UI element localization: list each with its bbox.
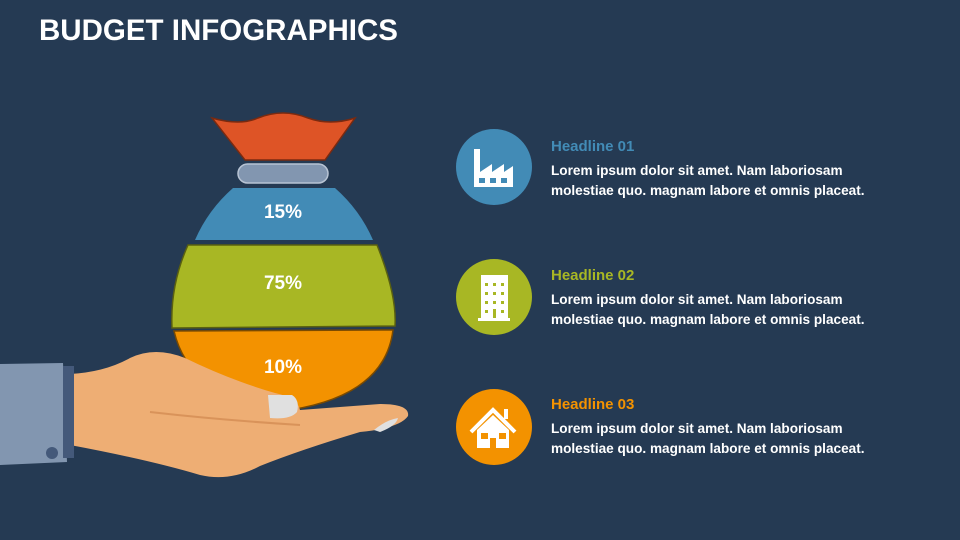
text block 03: Headline 03: [551, 396, 634, 413]
segment: 75%: [172, 245, 395, 328]
hand: [0, 352, 408, 477]
segment: 15%: 15%: [264, 202, 302, 223]
text block 01: Lorem ipsum dolor sit amet. Nam laboriosam: [551, 163, 843, 178]
icon: house: [456, 389, 532, 465]
icon: factory: [456, 129, 532, 205]
title: BUDGET INFOGRAPHICS: [39, 14, 398, 47]
text block 03: Lorem ipsum dolor sit amet. Nam laboriosam: [551, 421, 843, 436]
text block 02: Headline 02: [551, 267, 634, 284]
bag tie: [212, 113, 355, 160]
icon: office building: [456, 259, 532, 335]
segment: 10%: 10%: [264, 357, 302, 378]
text block 01: [551, 138, 864, 198]
segment: 10%: [174, 330, 393, 410]
text block 03: molestiae quo. magnam labore et omnis placeat.: [551, 441, 864, 456]
text block 02: [551, 267, 864, 327]
sleeve: [0, 363, 67, 465]
text block 03: [551, 396, 864, 456]
text block 01: molestiae quo. magnam labore et omnis placeat.: [551, 183, 864, 198]
segment: 15%: [195, 188, 373, 240]
text block 01: Headline 01: [551, 138, 634, 155]
text block 02: molestiae quo. magnam labore et omnis placeat.: [551, 312, 864, 327]
bag band: [238, 164, 328, 183]
segment: 75%: 75%: [264, 273, 302, 294]
text block 02: Lorem ipsum dolor sit amet. Nam laboriosam: [551, 292, 843, 307]
